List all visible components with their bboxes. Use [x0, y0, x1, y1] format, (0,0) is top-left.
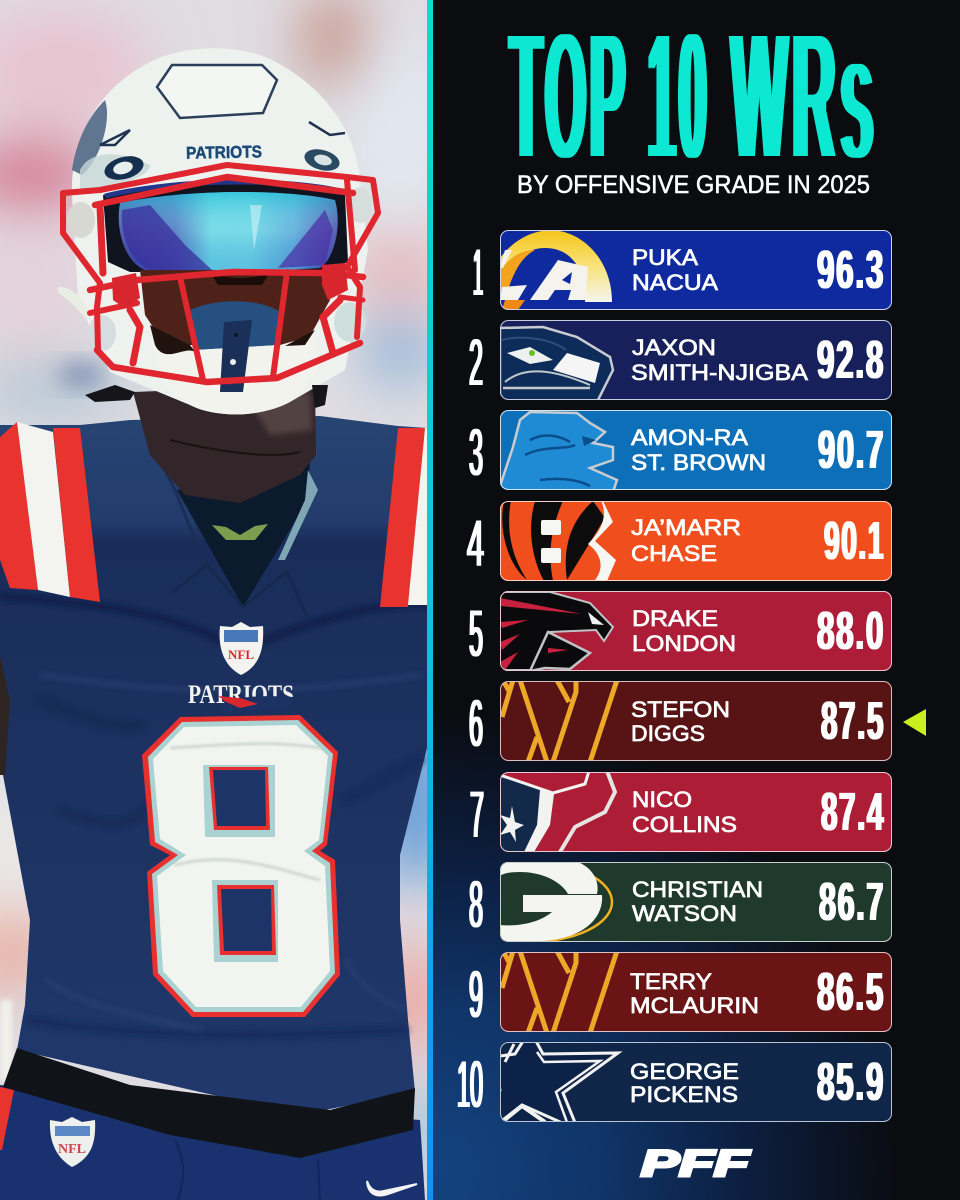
logo: Texans: [500, 771, 615, 852]
chest wordmark: PATRIOTS: [188, 680, 294, 709]
text: 6: [469, 686, 483, 760]
neck: [133, 385, 316, 503]
logo: Packers: [448, 862, 612, 942]
text: 5: [469, 596, 483, 670]
player name: JA’MARR: [631, 515, 741, 540]
blurred stadium background: [0, 0, 450, 1200]
player name: [631, 697, 730, 746]
grade: 87.4: [821, 782, 885, 842]
logo: Bengals: [502, 500, 616, 581]
text: 8: [469, 867, 483, 941]
grade: 85.9: [817, 1052, 885, 1112]
logo: Lions: [498, 412, 617, 492]
arrow: highlight marker: [903, 709, 926, 736]
text: 2: [469, 325, 483, 399]
row 5: Drake London: [500, 591, 892, 671]
player name: NICO: [632, 787, 692, 812]
player name: CHRISTIAN: [632, 877, 763, 902]
player name: [630, 1059, 739, 1107]
waistband: [3, 1048, 415, 1158]
player name: [631, 335, 808, 385]
chin strap: [190, 340, 306, 414]
text: 1: [473, 235, 483, 309]
player name: GEORGE: [630, 1059, 739, 1084]
player name: CHASE: [631, 541, 717, 566]
row 10: George Pickens: [470, 1030, 892, 1130]
row 4: Ja'Marr Chase: [500, 500, 892, 581]
text: 10: [457, 1047, 483, 1121]
player name: [632, 245, 718, 295]
grade: 86.5: [817, 962, 885, 1022]
helmet shell: [72, 48, 368, 414]
helmet: [58, 48, 378, 414]
player name: [630, 969, 759, 1018]
text: 3: [469, 415, 483, 489]
grade: 92.8: [817, 330, 885, 390]
top vent: [157, 65, 277, 118]
photo panel: player: [0, 0, 450, 1200]
player name: WATSON: [632, 901, 737, 926]
row 8: Christian Watson: [448, 862, 892, 942]
divider line: [427, 0, 433, 1200]
arm: [0, 655, 10, 775]
player name: AMON-RA: [631, 425, 748, 450]
pants: [0, 1085, 425, 1200]
PFF logo: PFF: [641, 1143, 751, 1184]
jersey shading and wrinkles: [0, 596, 427, 1034]
row 2: Jaxon Smith-Njigba: [500, 320, 892, 402]
face: [85, 270, 330, 414]
player name: LONDON: [632, 631, 736, 656]
NFL shield on pants: [50, 1117, 95, 1167]
side bumpers: [67, 202, 95, 238]
logo: Commanders: [502, 951, 617, 1033]
player name: NACUA: [632, 270, 718, 295]
grade: 90.7: [818, 420, 885, 480]
text: 4: [467, 506, 484, 580]
grade: 90.1: [824, 511, 885, 571]
undershirt and collar: [164, 462, 318, 618]
player name: ST. BROWN: [631, 450, 766, 475]
text: 7: [470, 777, 484, 851]
NFL shield on pants: NFL: [58, 1142, 86, 1157]
player name: PUKA: [632, 245, 698, 270]
rank numbers: [457, 235, 484, 1121]
row 6: Stefon Diggs: [500, 680, 892, 762]
text: 9: [469, 957, 483, 1031]
player name: TERRY: [630, 969, 712, 994]
player name: DRAKE: [632, 606, 718, 631]
grade: 86.7: [819, 872, 885, 932]
NFL shield on chest: [220, 622, 263, 675]
goggle frame: [103, 182, 348, 272]
row 7: Nico Collins: [500, 771, 892, 852]
logo: Falcons: [500, 592, 613, 671]
helmet wordmark: PATRIOTS: [186, 142, 262, 163]
right panel background: [427, 0, 960, 1200]
logo: Seahawks: [500, 327, 613, 402]
NFL shield on chest: NFL: [228, 647, 254, 662]
grade: 87.5: [821, 691, 885, 751]
sleeve stripes: [0, 422, 427, 607]
logo: Cowboys: [470, 1030, 618, 1130]
player name: JAXON: [632, 335, 716, 360]
player name: STEFON: [631, 697, 730, 722]
grade: 96.3: [817, 240, 885, 300]
player name: MCLAURIN: [630, 993, 759, 1018]
logo: Commanders: [502, 680, 617, 762]
nike swoosh: [367, 1181, 417, 1195]
jersey: [0, 416, 427, 1115]
subtitle: BY OFFENSIVE GRADE IN 2025: [517, 171, 870, 199]
facemask: [63, 165, 378, 382]
ear holes: [104, 156, 144, 180]
player name: [631, 425, 766, 475]
jersey number 8: [142, 715, 340, 1017]
visor: [105, 182, 345, 271]
row 9: Terry McLaurin: [500, 951, 892, 1033]
player name: [632, 606, 736, 656]
row 1: Puka Nacua: [500, 230, 892, 310]
player name: SMITH-NJIGBA: [631, 360, 808, 385]
player name: [632, 877, 763, 926]
player name: [632, 787, 737, 837]
row 3: Amon-Ra St. Brown: [498, 410, 892, 492]
player name: [631, 515, 741, 566]
player name: DIGGS: [631, 721, 705, 746]
player name: COLLINS: [632, 812, 737, 837]
logo: Rams: [500, 230, 612, 310]
grade: 88.0: [817, 601, 885, 661]
player name: PICKENS: [630, 1082, 738, 1107]
